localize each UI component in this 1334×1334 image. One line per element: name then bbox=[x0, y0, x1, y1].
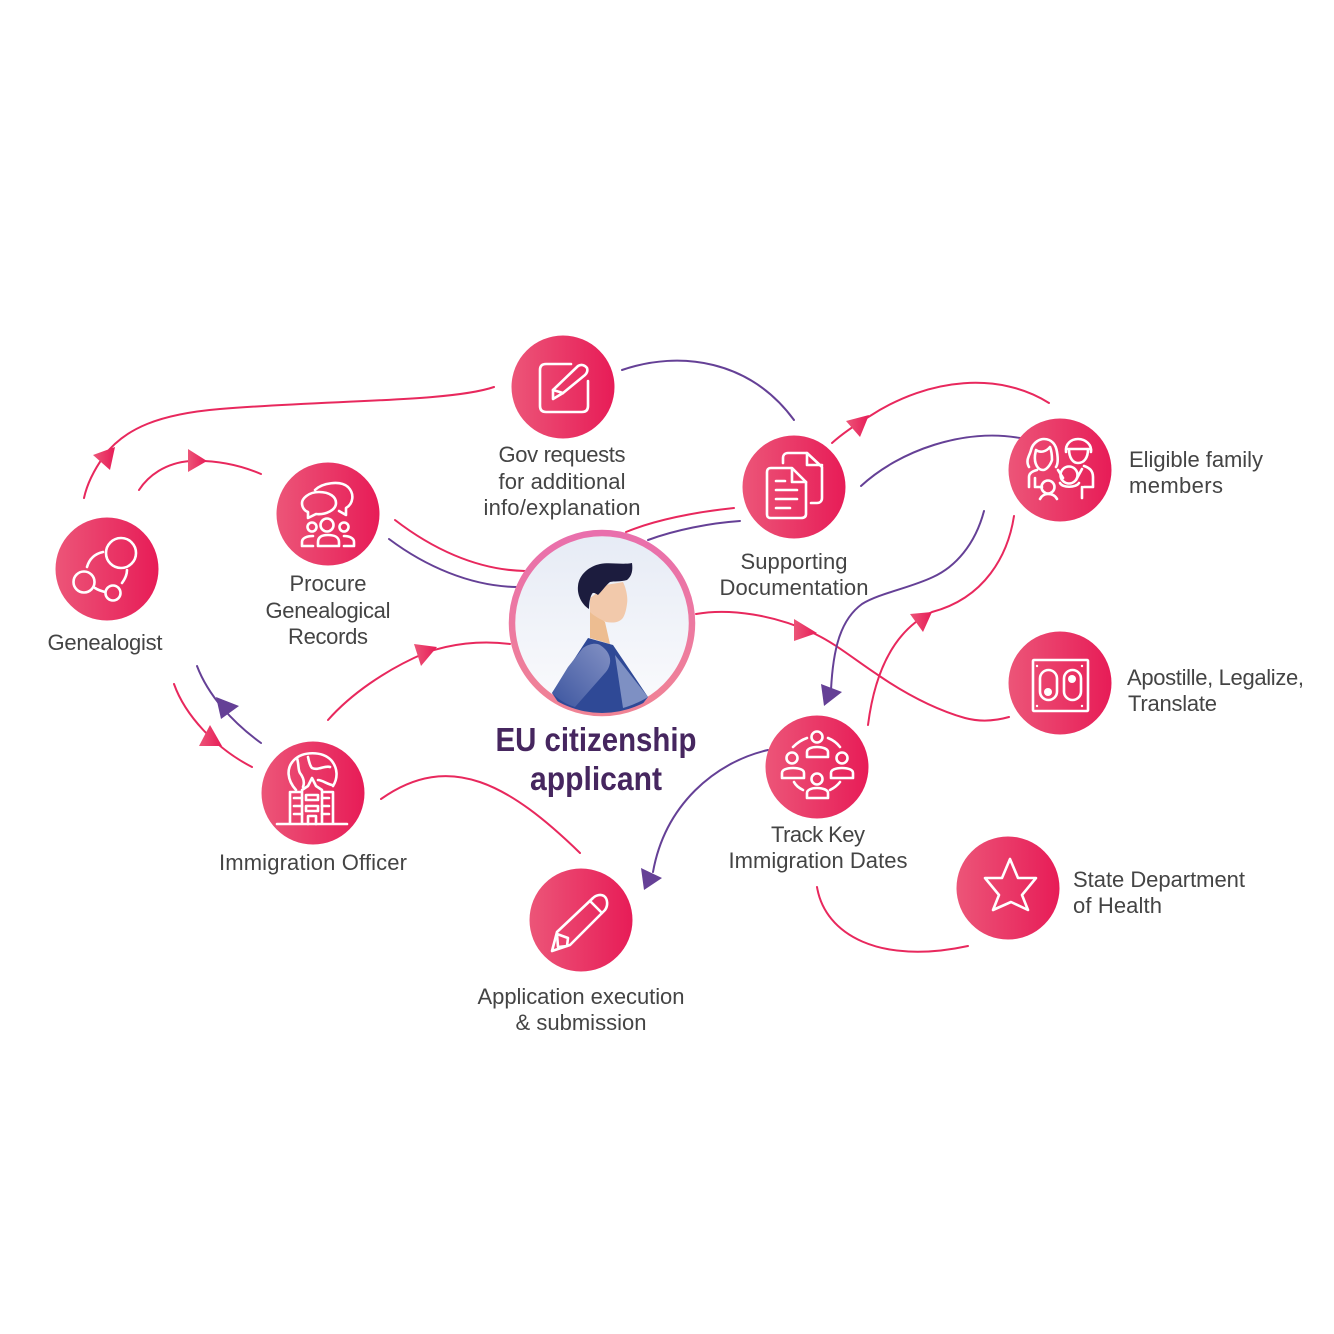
portrait ring bbox=[512, 533, 692, 713]
label: Apostille, Legalize, bbox=[1127, 665, 1304, 690]
connector: Gov requests to Supporting Documentation bbox=[622, 361, 794, 420]
label: Genealogical bbox=[266, 598, 390, 623]
arrows and connectors bbox=[84, 361, 1049, 952]
icon: people circle bbox=[766, 716, 868, 818]
connector: applicant to Apostille bbox=[696, 612, 1009, 721]
label: Application execution bbox=[478, 984, 684, 1009]
node: Gov requests bbox=[484, 336, 640, 520]
icon: connected circles bbox=[56, 518, 158, 620]
connector: Track Key Dates to Application bbox=[641, 750, 768, 890]
label bbox=[266, 571, 390, 649]
node: State Department of Health bbox=[956, 836, 1245, 940]
connector: Gov requests to Genealogist bbox=[84, 387, 494, 498]
icon: stamps panel bbox=[1008, 632, 1112, 734]
node: Genealogist bbox=[48, 518, 162, 655]
icon: star bbox=[956, 836, 1060, 940]
connector: Eligible family to Supporting Documentation bbox=[832, 383, 1049, 443]
connector: Track Key Dates to State Department bbox=[817, 887, 968, 952]
connector: Genealogist to Immigration Officer bbox=[174, 684, 252, 767]
title: EU citizenship applicant bbox=[496, 721, 696, 797]
label: State Department bbox=[1073, 867, 1245, 892]
label: Supporting bbox=[740, 549, 848, 574]
label: Procure bbox=[290, 571, 366, 596]
connector: Supporting Documentation to applicant, pink bbox=[626, 508, 734, 532]
label bbox=[1073, 867, 1245, 918]
title: EU citizenship applicant: EU citizenship bbox=[496, 721, 696, 758]
label: Documentation bbox=[720, 575, 868, 600]
label: of Health bbox=[1073, 893, 1162, 918]
connector: Procure to applicant, pink bbox=[395, 520, 525, 571]
label: members bbox=[1129, 473, 1223, 498]
label: info/explanation bbox=[484, 495, 640, 520]
label: Eligible family bbox=[1129, 447, 1263, 472]
label: for additional bbox=[498, 469, 626, 494]
label bbox=[484, 442, 640, 520]
icon: documents bbox=[742, 436, 846, 538]
connector: Eligible family to Track Key Dates, purple bbox=[821, 511, 984, 706]
icon: family bbox=[1008, 418, 1112, 522]
connector: Immigration Officer to Genealogist bbox=[197, 666, 261, 743]
label bbox=[478, 984, 684, 1035]
person illustration bbox=[552, 563, 648, 720]
node: Procure Genealogical Records bbox=[266, 462, 390, 649]
title: EU citizenship applicant: applicant bbox=[530, 760, 662, 797]
connector: Supporting Documentation to Eligible family bbox=[861, 436, 1020, 486]
label: Track Key bbox=[771, 822, 865, 847]
node: Application execution bbox=[478, 868, 684, 1035]
node: Supporting Documentation bbox=[720, 436, 868, 600]
node: Immigration Officer bbox=[219, 742, 407, 875]
icon: note with pencil bbox=[512, 336, 614, 438]
label: Genealogist bbox=[48, 630, 162, 655]
icon: globe and building bbox=[262, 742, 364, 844]
label: & submission bbox=[516, 1010, 646, 1035]
connector: Track Key Dates to Eligible family, pink bbox=[868, 516, 1014, 725]
label: Immigration Dates bbox=[728, 848, 908, 873]
connector: applicant to Immigration Officer bbox=[328, 642, 510, 720]
connector: Immigration Officer to Application bbox=[381, 776, 580, 853]
label: Records bbox=[288, 624, 368, 649]
label: Immigration Officer bbox=[219, 850, 407, 875]
label bbox=[720, 549, 868, 600]
node: Eligible family members bbox=[1008, 418, 1263, 522]
node: Apostille bbox=[1008, 632, 1304, 734]
central applicant portrait bbox=[512, 533, 692, 720]
label: Translate bbox=[1128, 691, 1217, 716]
label bbox=[1127, 665, 1304, 716]
icon: speech and people bbox=[276, 462, 380, 566]
connector: Procure to applicant, purple bbox=[389, 539, 516, 587]
node: Track Key Immigration Dates bbox=[728, 716, 908, 873]
label: Gov requests bbox=[498, 442, 626, 467]
label bbox=[728, 822, 908, 873]
connector: Procure to Genealogist bbox=[139, 449, 261, 490]
connector: Supporting Documentation to applicant, purple bbox=[648, 521, 740, 540]
icon: pencil bbox=[530, 868, 632, 972]
label bbox=[1129, 447, 1263, 498]
